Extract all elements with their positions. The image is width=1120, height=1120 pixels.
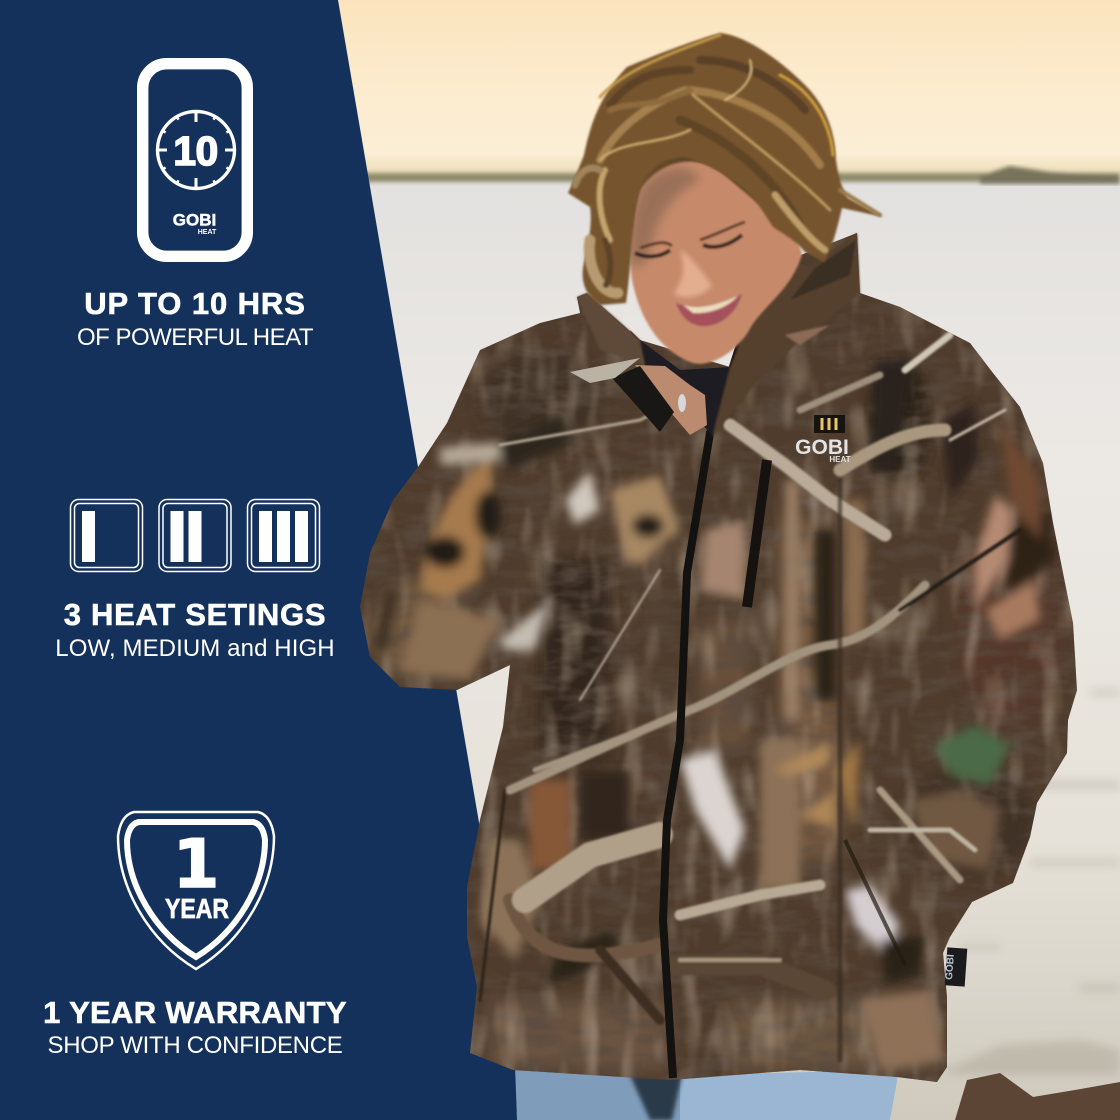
sky (0, 0, 1120, 180)
heat label: HEAT (198, 229, 217, 236)
soft colour patches (370, 350, 1065, 1070)
gobi logo: GOBI (173, 210, 216, 230)
dark undershirt (630, 330, 735, 435)
branches (480, 335, 1020, 1060)
main zipper (663, 267, 770, 1078)
hair (568, 33, 883, 305)
chest pocket zipper (747, 460, 767, 607)
jacket tag (944, 947, 967, 987)
jeans (515, 1065, 899, 1120)
face (623, 143, 813, 364)
setting low (70, 500, 142, 572)
sleeve fold (570, 358, 640, 383)
clock (157, 111, 235, 189)
text: low, medium and high: LOW, MEDIUM and HIGH (55, 635, 335, 662)
setting medium (159, 500, 231, 572)
shield number: 1 (173, 825, 219, 903)
far shoreline (340, 166, 1120, 184)
heading: 1 year warranty: 1 YEAR WARRANTY (43, 995, 347, 1030)
jacket logo: HEAT (829, 455, 851, 464)
light bark texture (362, 238, 1073, 1081)
photo: woman in camo jacket by the water, with blue side panel (338, 0, 1120, 1120)
bark texture (363, 244, 1077, 1082)
trunks, leaves and bark patches (374, 360, 1055, 1070)
heat controller badge (814, 415, 845, 433)
jacket logo: GOBI (795, 436, 849, 459)
water ripples (945, 690, 1120, 1075)
jacket tag: GOBI (944, 954, 957, 980)
clock number: 10 (173, 128, 218, 174)
ring (678, 394, 686, 412)
rock (955, 1073, 1120, 1120)
pocket flap line (845, 840, 905, 965)
setting high (248, 500, 320, 572)
text: of powerful heat: OF POWERFUL HEAT (77, 324, 313, 351)
cuff (612, 366, 674, 432)
hand with ring (570, 358, 707, 435)
collar (577, 233, 860, 437)
heading: 3 heat setings: 3 HEAT SETINGS (64, 597, 326, 632)
camo jacket (340, 220, 1100, 1100)
heading: up to 10 hrs: UP TO 10 HRS (84, 286, 306, 321)
blue side panel (0, 0, 530, 1120)
shield label: YEAR (165, 893, 229, 924)
text: shop with confidence: SHOP WITH CONFIDENCE (48, 1032, 342, 1059)
